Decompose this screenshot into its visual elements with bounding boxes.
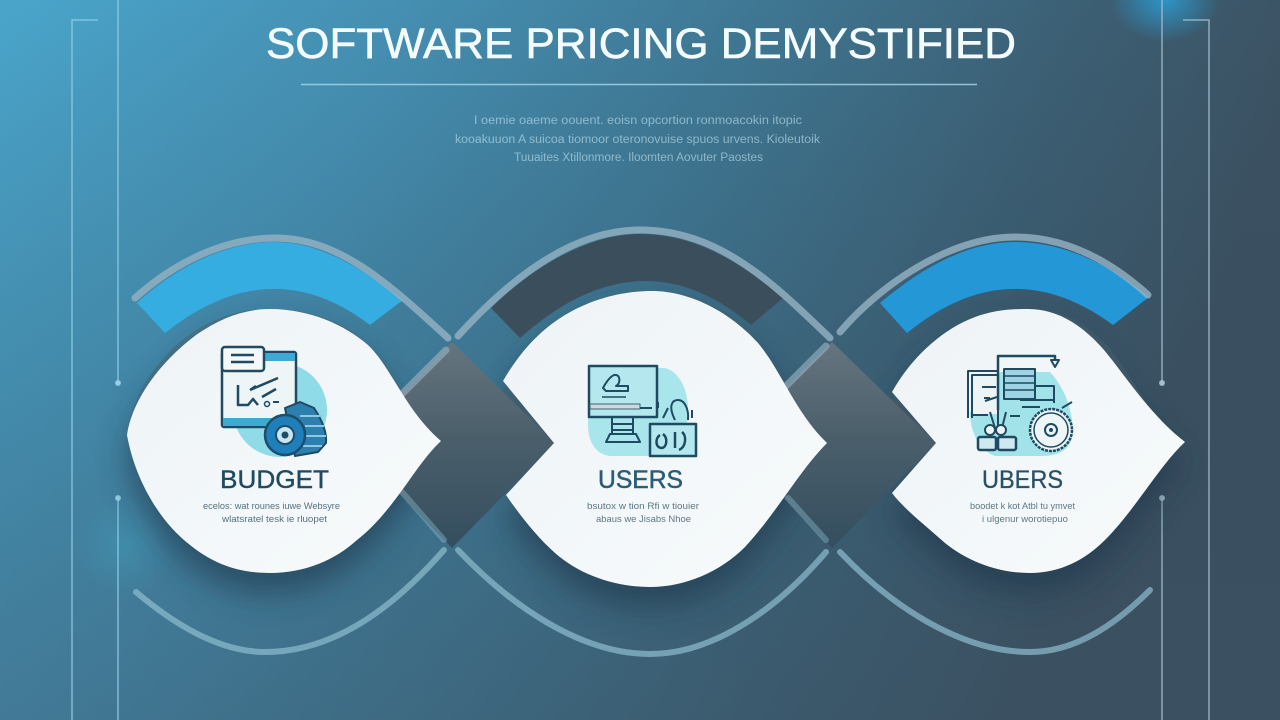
users shape [503, 291, 827, 587]
title: SOFTWARE PRICING DEMYSTIFIED [266, 20, 1016, 68]
panel: budget [127, 309, 441, 573]
upper wave lines [135, 230, 1148, 394]
arc band: blue left [137, 242, 403, 333]
ubers text: i ulgenur worotiepuo [982, 514, 1068, 525]
budget shape [127, 309, 441, 573]
ubers text: boodet k kot Atbl tu ymvet [970, 501, 1075, 512]
ubers heading: UBERS [982, 466, 1063, 494]
chevron connector 1 [350, 342, 555, 548]
budget text [203, 501, 340, 525]
budget text: wlatsratel tesk ie rluopet [221, 514, 327, 525]
left frame lines [72, 0, 120, 720]
users heading: USERS [598, 466, 683, 494]
arc band: blue right [880, 242, 1149, 333]
right frame lines [1160, 0, 1209, 720]
users text: bsutox w tion Rfi w tiouier [587, 501, 699, 512]
chevron connector 2 [730, 342, 936, 548]
shape halos [127, 311, 1185, 607]
panel: users [503, 291, 827, 587]
arc band: dark center [491, 234, 783, 338]
intro text [455, 115, 820, 164]
users text [587, 501, 699, 525]
lower wave lines [136, 492, 1150, 654]
ubers shape [892, 309, 1185, 573]
panel: ubers [892, 309, 1185, 573]
budget heading: BUDGET [220, 466, 329, 494]
ubers text [970, 501, 1075, 525]
icon: documents and gear [968, 356, 1073, 456]
icon: budget chart and coins [222, 347, 327, 457]
intro text: kooakuuon A suicoa tiomoor oteronovuise spuos urvens. Kioleutoik [455, 134, 820, 146]
icon: monitor and lock [588, 366, 696, 456]
title divider [301, 84, 977, 86]
intro text: Tuuaites Xtillonmore. Iloomten Aovuter Paostes [514, 152, 763, 164]
users text: abaus we Jisabs Nhoe [596, 514, 691, 525]
intro text: I oemie oaeme oouent. eoisn opcortion ronmoacokin itopic [474, 115, 802, 127]
budget text: ecelos: wat rounes iuwe Websyre [203, 501, 340, 512]
